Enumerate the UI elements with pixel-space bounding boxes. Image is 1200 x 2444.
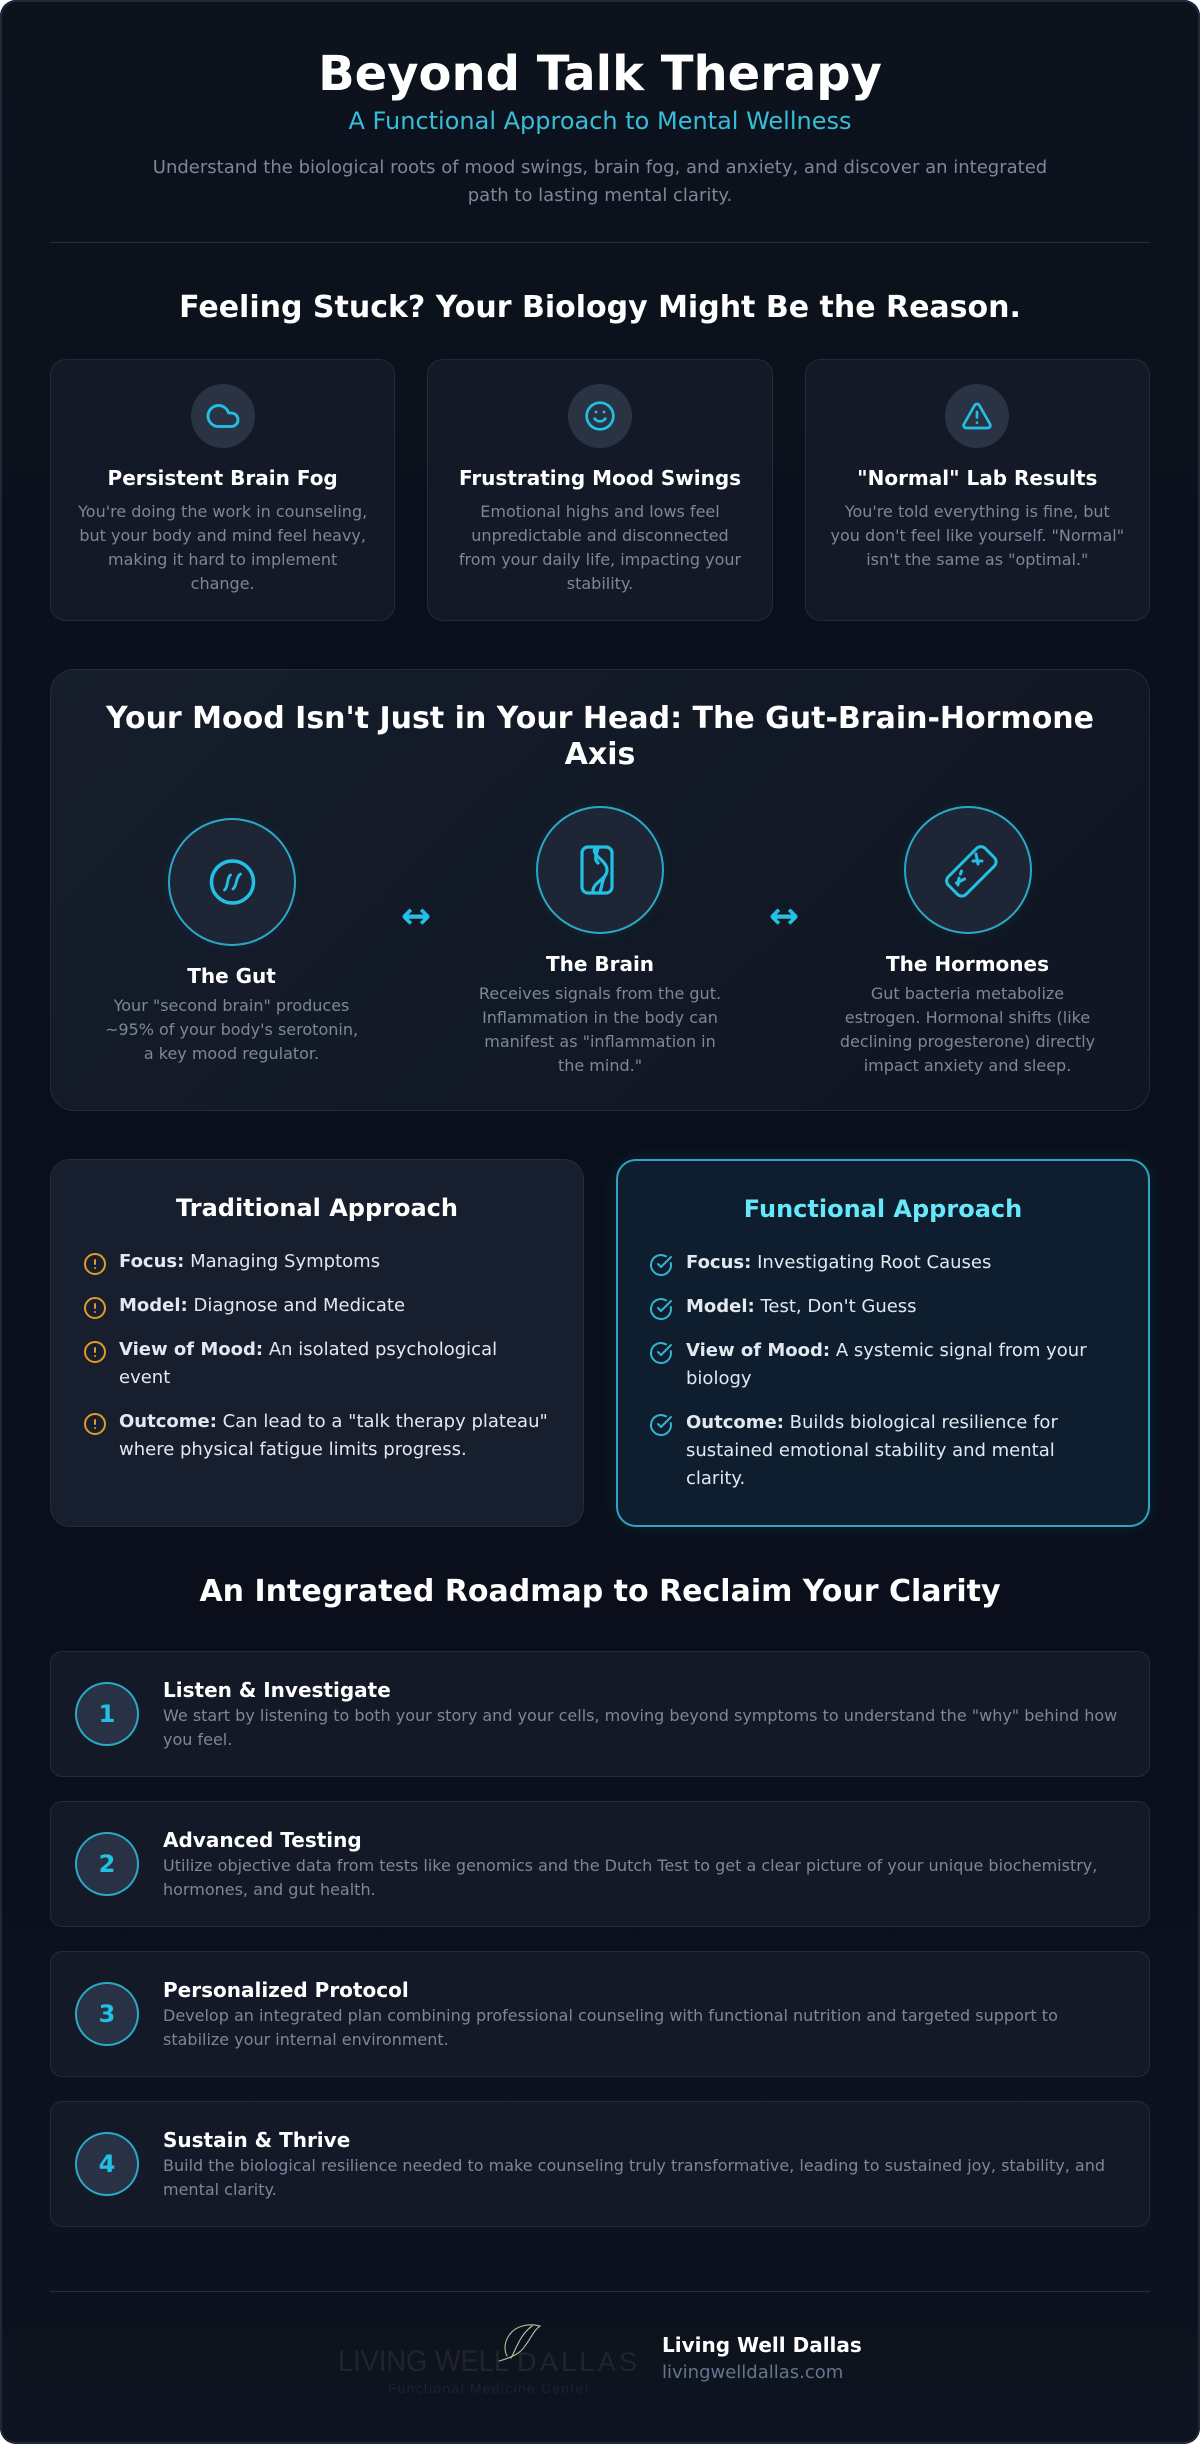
card text: change. (191, 574, 255, 592)
step number: 1 (99, 1700, 115, 1728)
node: the brain (479, 806, 721, 1074)
panel heading: Functional Approach (744, 1195, 1022, 1223)
icon: check (650, 1414, 672, 1436)
icon: smile (568, 384, 632, 448)
panel: normal lab results (805, 359, 1150, 621)
list item (119, 1339, 497, 1388)
step text: Utilize objective data from tests like genomics and the Dutch Test to get a clear picture of your unique biochemistry, (163, 1856, 1097, 1874)
node text: Gut bacteria metabolize (871, 984, 1064, 1002)
icon: check (650, 1298, 672, 1320)
step number (75, 1982, 139, 2046)
step title: Advanced Testing (163, 1828, 362, 1852)
footer url: livingwelldallas.com (662, 2362, 843, 2382)
node text: impact anxiety and sleep. (864, 1056, 1071, 1074)
icon: alert (84, 1297, 106, 1319)
card text: You're told everything is fine, but (845, 502, 1110, 520)
step number: 3 (99, 2000, 115, 2028)
list item: sustained emotional stability and mental (686, 1440, 1055, 1461)
icon: cloud (191, 384, 255, 448)
node title: The Gut (187, 964, 276, 988)
heading: feeling stuck: Feeling Stuck? Your Biology Might Be the Reason. (179, 290, 1021, 325)
icon: alert (84, 1341, 106, 1363)
list item: Model: Diagnose and Medicate (119, 1295, 405, 1316)
logo: DALLAS (517, 2347, 637, 2377)
card title: Persistent Brain Fog (108, 466, 338, 490)
step number (75, 1832, 139, 1896)
footer name: Living Well Dallas (662, 2333, 862, 2357)
node title: The Brain (546, 952, 654, 976)
step text (163, 1856, 1097, 1898)
node text: Your "second brain" produces (114, 996, 349, 1014)
node text (105, 996, 358, 1062)
step text (163, 2006, 1058, 2048)
list item (686, 1340, 1087, 1389)
panel: persistent brain fog (50, 359, 395, 621)
icon: check (650, 1254, 672, 1276)
card title: "Normal" Lab Results (857, 466, 1097, 490)
icon: gut (168, 818, 296, 946)
step text (163, 2156, 1105, 2198)
icon: check (650, 1342, 672, 1364)
node text: a key mood regulator. (144, 1044, 319, 1062)
list item: biology (686, 1368, 752, 1389)
node text: estrogen. Hormonal shifts (like (845, 1008, 1090, 1026)
arrow: gut to brain: ↔ (401, 896, 431, 937)
node text: Receives signals from the gut. (479, 984, 721, 1002)
step text: mental clarity. (163, 2180, 277, 2198)
step title: Sustain & Thrive (163, 2128, 350, 2152)
card text: unpredictable and disconnected (471, 526, 729, 544)
subtitle: A Functional Approach to Mental Wellness (348, 107, 852, 135)
step text (163, 1706, 1117, 1748)
card text (78, 502, 367, 592)
icon: brain (536, 806, 664, 934)
title: Beyond Talk Therapy (318, 46, 882, 102)
heading: roadmap: An Integrated Roadmap to Reclaim Your Clarity (199, 1574, 1001, 1609)
node title: The Hormones (886, 952, 1049, 976)
icon: warning triangle (945, 384, 1009, 448)
step title: Personalized Protocol (163, 1978, 409, 2002)
card text: stability. (567, 574, 633, 592)
card title: Frustrating Mood Swings (459, 466, 741, 490)
card text (459, 502, 742, 592)
axis heading (106, 701, 1094, 772)
list item: Model: Test, Don't Guess (686, 1296, 917, 1317)
card text: from your daily life, impacting your (459, 550, 741, 568)
list item (119, 1411, 548, 1460)
node text: Inflammation in the body can (482, 1008, 718, 1026)
list item: Outcome: Builds biological resilience for (686, 1412, 1058, 1433)
step text: you feel. (163, 1730, 232, 1748)
logo (338, 2324, 637, 2396)
icon: alert (84, 1253, 106, 1275)
list item: where physical fatigue limits progress. (119, 1439, 467, 1460)
icon: alert (84, 1413, 106, 1435)
step 1 (50, 1651, 1150, 1777)
card text: making it hard to implement (108, 550, 337, 568)
node: the gut (105, 818, 358, 1062)
list item: clarity. (686, 1468, 745, 1489)
step 4 (50, 2101, 1150, 2227)
step text: stabilize your internal environment. (163, 2030, 449, 2048)
step text: We start by listening to both your story and your cells, moving beyond symptoms to understand the "why" behind how (163, 1706, 1117, 1724)
list item: Focus: Managing Symptoms (119, 1251, 380, 1272)
step number (75, 1682, 139, 1746)
card text: you don't feel like yourself. "Normal" (831, 526, 1124, 544)
icon: leaf (499, 2325, 540, 2361)
step 3 (50, 1951, 1150, 2077)
arrow: brain to hormones: ↔ (769, 896, 799, 937)
list item: Outcome: Can lead to a "talk therapy plateau" (119, 1411, 548, 1432)
node text: manifest as "inflammation in (484, 1032, 716, 1050)
node: the hormones (840, 806, 1095, 1074)
logo: LIVING WELL (338, 2345, 509, 2378)
step 2 (50, 1801, 1150, 1927)
header (153, 46, 1047, 206)
step text: hormones, and gut health. (163, 1880, 376, 1898)
panel: frustrating mood swings (427, 359, 773, 621)
card text: but your body and mind feel heavy, (79, 526, 366, 544)
icon: hormones (904, 806, 1032, 934)
list item: Focus: Investigating Root Causes (686, 1252, 991, 1273)
intro text (153, 157, 1047, 206)
logo: Functional Medicine Center (388, 2381, 590, 2396)
step number (75, 2132, 139, 2196)
step number: 2 (99, 1850, 115, 1878)
node text: ~95% of your body's serotonin, (105, 1020, 358, 1038)
step number: 4 (99, 2150, 115, 2178)
axis heading: Axis (565, 737, 635, 772)
node text: declining progesterone) directly (840, 1032, 1095, 1050)
intro text: Understand the biological roots of mood swings, brain fog, and anxiety, and discover an integrated (153, 157, 1047, 178)
node text (840, 984, 1095, 1074)
panel: traditional approach (50, 1159, 584, 1527)
step text: Develop an integrated plan combining professional counseling with functional nutrition and targeted support to (163, 2006, 1058, 2024)
node text: the mind." (558, 1056, 642, 1074)
node text (479, 984, 721, 1074)
step text: Build the biological resilience needed to make counseling truly transformative, leading to sustained joy, stability, and (163, 2156, 1105, 2174)
panel: functional approach (616, 1159, 1150, 1527)
footer (338, 2324, 862, 2396)
card text (831, 502, 1124, 568)
panel heading: Traditional Approach (176, 1194, 458, 1222)
card text: isn't the same as "optimal." (866, 550, 1088, 568)
list item: View of Mood: An isolated psychological (119, 1339, 497, 1360)
card text: You're doing the work in counseling, (78, 502, 367, 520)
list item: event (119, 1367, 170, 1388)
list item: View of Mood: A systemic signal from your (686, 1340, 1087, 1361)
card text: Emotional highs and lows feel (480, 502, 720, 520)
panel: gut-brain-hormone axis (50, 669, 1150, 1111)
list item (686, 1412, 1058, 1489)
axis heading: Your Mood Isn't Just in Your Head: The Gut-Brain-Hormone (106, 701, 1094, 736)
intro text: path to lasting mental clarity. (468, 185, 732, 206)
step title: Listen & Investigate (163, 1678, 391, 1702)
